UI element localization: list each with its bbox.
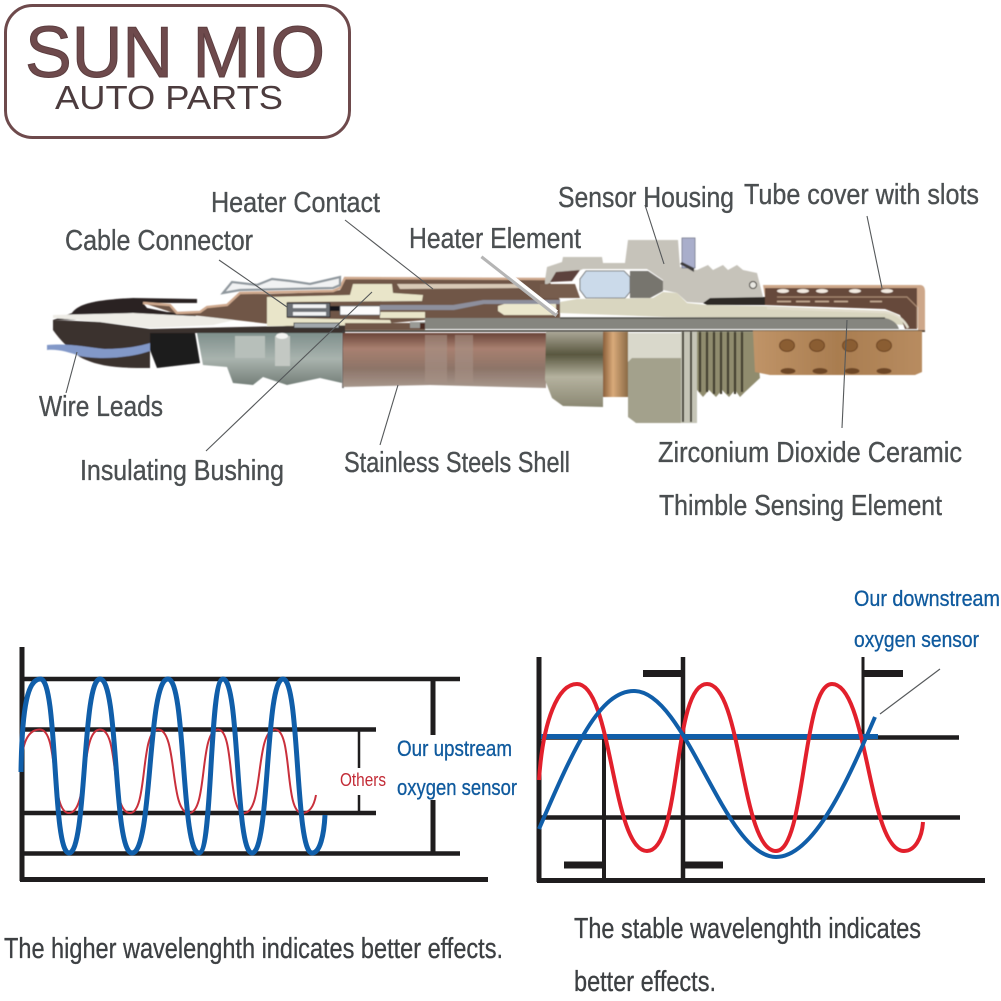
label: Our downstream oxygen sensor: oxygen sensor xyxy=(854,627,979,652)
label: Our upstream oxygen sensor: Our upstream xyxy=(397,736,512,761)
logo: Sun Mio Auto Parts: SUN MIO xyxy=(25,13,325,93)
blue wave: our upstream sensor xyxy=(21,679,325,853)
label: Our upstream oxygen sensor xyxy=(390,735,520,800)
bushing xyxy=(197,333,342,385)
stainless steel shell xyxy=(343,333,546,388)
crimp ring xyxy=(223,277,340,293)
label: Zirconium Dioxide Ceramic: Zirconium Dioxide Ceramic xyxy=(658,437,962,469)
tube cover inner view with slots xyxy=(763,285,925,332)
perforated copper tip xyxy=(753,331,922,375)
label: Heater Element: Heater Element xyxy=(409,223,581,255)
chart: downstream sensor wave comparison xyxy=(537,586,1000,882)
chart: upstream sensor wave comparison xyxy=(20,647,520,881)
heater element pointer needle xyxy=(482,253,557,315)
label: Insulating Bushing: Insulating Bushing xyxy=(80,455,284,487)
hex nut xyxy=(628,333,681,423)
oxygen sensor cutaway illustration xyxy=(47,238,925,423)
heater beige inlay xyxy=(498,304,556,315)
label: Our upstream oxygen sensor: oxygen sensor xyxy=(397,775,517,800)
logo: Sun Mio Auto Parts: AUTO PARTS xyxy=(55,79,283,116)
lower inner strip xyxy=(345,323,425,330)
label: Sensor Housing: Sensor Housing xyxy=(558,182,734,214)
washer xyxy=(681,332,697,423)
sensor upper brown sheath xyxy=(143,279,560,326)
caption: stable wavelength: The stable wavelenghth indicates xyxy=(574,913,921,945)
pointer to downstream wave xyxy=(880,669,940,714)
caption: higher wavelength: The higher wavelenghth indicates better effects. xyxy=(4,933,503,965)
red wave: others xyxy=(22,730,316,813)
label: Thimble Sensing Element: Thimble Sensing Element xyxy=(659,490,942,522)
red wave xyxy=(539,684,923,851)
heater element bright shoulder xyxy=(560,292,905,325)
wire leads xyxy=(47,298,345,368)
thread xyxy=(697,332,760,397)
label: Cable Connector: Cable Connector xyxy=(65,225,253,257)
label: Wire Leads: Wire Leads xyxy=(39,391,163,423)
label: Others: Others xyxy=(340,770,386,790)
leader lines xyxy=(66,205,882,451)
ceramic insulator xyxy=(267,284,423,326)
label: Stainless Steels Shell: Stainless Steels Shell xyxy=(344,447,570,479)
caption: stable wavelength: better effects. xyxy=(574,966,716,998)
hex ring xyxy=(545,332,628,407)
label: Our downstream oxygen sensor xyxy=(854,586,1000,652)
heater contact tube xyxy=(380,300,560,310)
label: Heater Contact: Heater Contact xyxy=(211,187,380,219)
logo: Sun Mio Auto Parts xyxy=(6,6,350,138)
caption: stable wavelength xyxy=(574,913,921,998)
zirconium ceramic thimble tube xyxy=(425,318,899,329)
sensor housing body xyxy=(540,238,763,303)
cable connector contacts xyxy=(287,303,380,328)
blue wave: our downstream sensor xyxy=(539,691,875,857)
